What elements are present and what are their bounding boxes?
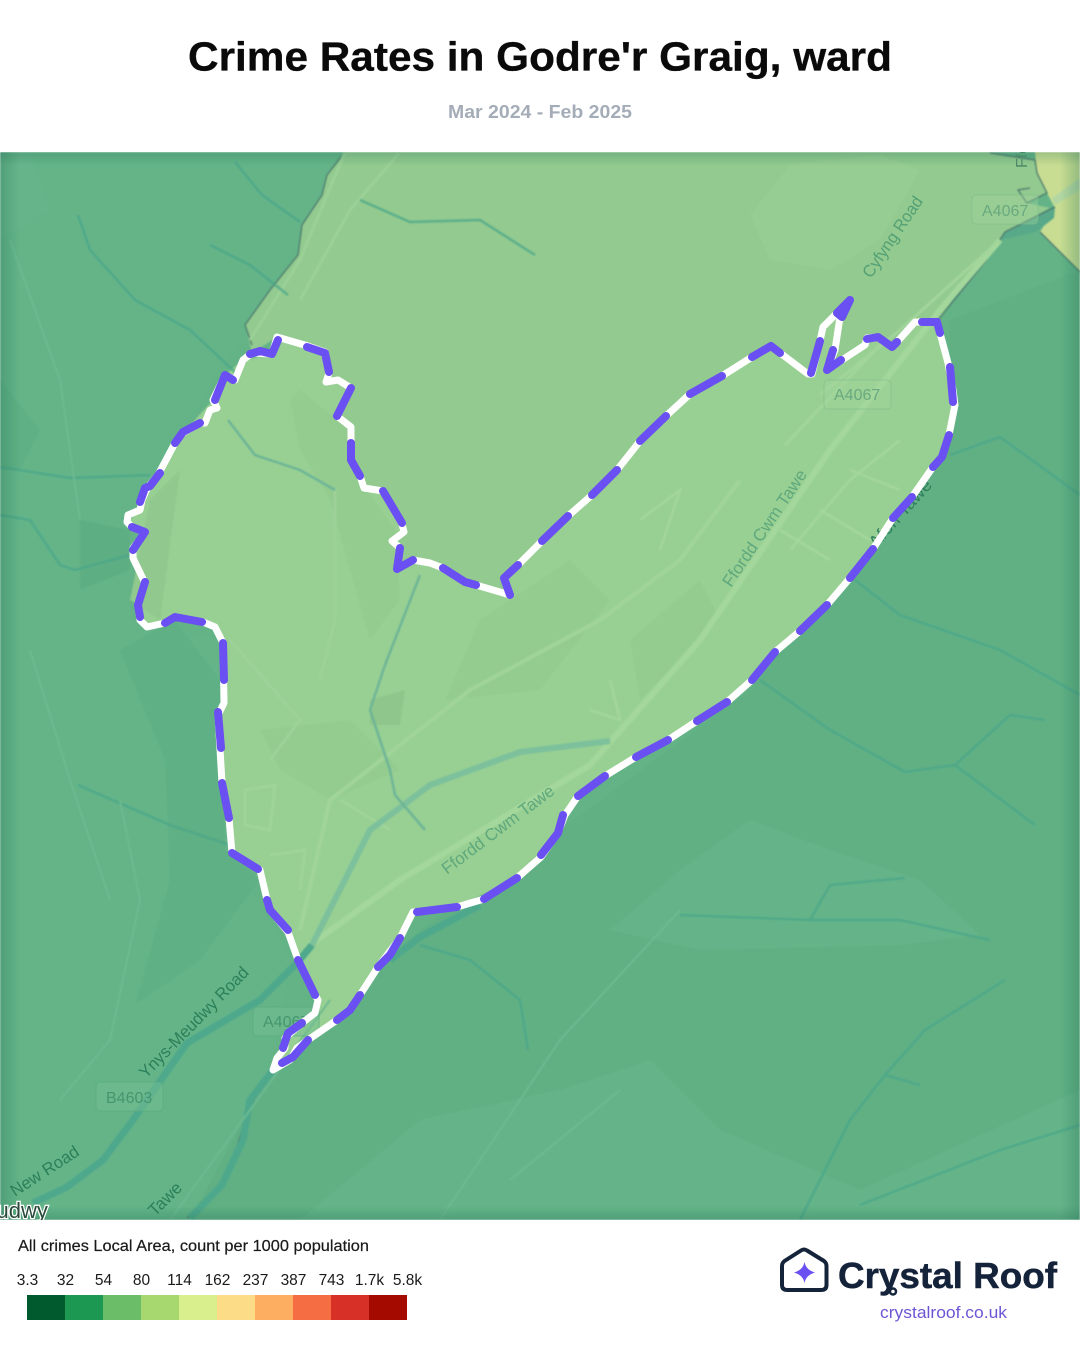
legend	[17, 1238, 422, 1320]
legend scale values: 54	[95, 1272, 112, 1289]
road shield: A4067 upper right	[972, 195, 1038, 224]
legend scale values: 5.8k	[393, 1272, 422, 1289]
wordmark: Crystal Roof	[838, 1255, 1058, 1296]
upper area north of the ward	[245, 152, 1050, 610]
road shield: B4603: B4603	[106, 1090, 152, 1107]
legend scale values: 237	[243, 1272, 268, 1289]
legend scale values: 80	[133, 1272, 150, 1289]
roads in the valley	[310, 240, 1000, 945]
road shield: A4067 centre: A4067	[834, 387, 880, 404]
ward boundary	[127, 300, 955, 1070]
wordmark y-tail ring	[890, 1288, 896, 1294]
icon: house outline with star	[782, 1250, 826, 1290]
road shield: A4067 upper right: A4067	[982, 203, 1028, 220]
legend scale values: 1.7k	[355, 1272, 384, 1289]
ward fill	[127, 300, 955, 1070]
teal main road bands	[33, 945, 312, 1203]
road label: Ffordd Cwm Tawe upper: Ffordd Cwm Tawe	[719, 466, 811, 590]
white boundary line	[127, 300, 955, 1070]
legend scale values: 114	[167, 1272, 192, 1289]
purple dashes	[132, 300, 953, 1063]
pale tracks outside the ward	[72, 476, 653, 1122]
thin administrative borders	[187, 152, 1080, 1218]
legend title: All crimes Local Area, count per 1000 population	[18, 1238, 369, 1255]
map	[0, 145, 1080, 1223]
road shield: B4603	[96, 1082, 163, 1111]
vignette	[0, 152, 1080, 1220]
legend scale values	[17, 1272, 422, 1289]
road label: Tawe: Tawe	[144, 1178, 186, 1220]
brand logo	[782, 1250, 1058, 1322]
road label: Ynys-Meudwy Road: Ynys-Meudwy Road	[135, 963, 253, 1082]
road label: Ffordd top right: Ffo	[1014, 145, 1031, 168]
road label: Cyfyng Road: Cyfyng Road	[859, 193, 927, 281]
legend colour swatches	[27, 1295, 407, 1320]
road shield: A4067 lower	[253, 1007, 319, 1036]
road label: Ffordd Cwm Tawe lower: Ffordd Cwm Tawe	[438, 781, 558, 878]
legend scale values: 32	[57, 1272, 74, 1289]
website: crystalroof.co.uk	[880, 1304, 1008, 1322]
map base: surrounding low-crime area	[0, 152, 1080, 1220]
legend scale values: 162	[205, 1272, 230, 1289]
road label: New Road: New Road	[7, 1142, 83, 1200]
river label: Afon Tawe: Afon Tawe	[865, 476, 936, 552]
top-right neighbouring area	[1035, 152, 1080, 272]
road shields and map labels	[0, 145, 1038, 1223]
road shield: A4067 lower: A4067	[263, 1014, 309, 1031]
subtitle: date range: Mar 2024 - Feb 2025	[448, 102, 632, 122]
teal sliver beside the boundary	[949, 208, 1056, 306]
streams	[0, 162, 1080, 1220]
legend scale values: 387	[281, 1272, 306, 1289]
legend scale values: 743	[319, 1272, 344, 1289]
title: Crime Rates in Godre'r Graig, ward	[188, 34, 892, 80]
road shield: A4067 centre	[824, 380, 891, 409]
legend scale values: 3.3	[17, 1272, 38, 1289]
